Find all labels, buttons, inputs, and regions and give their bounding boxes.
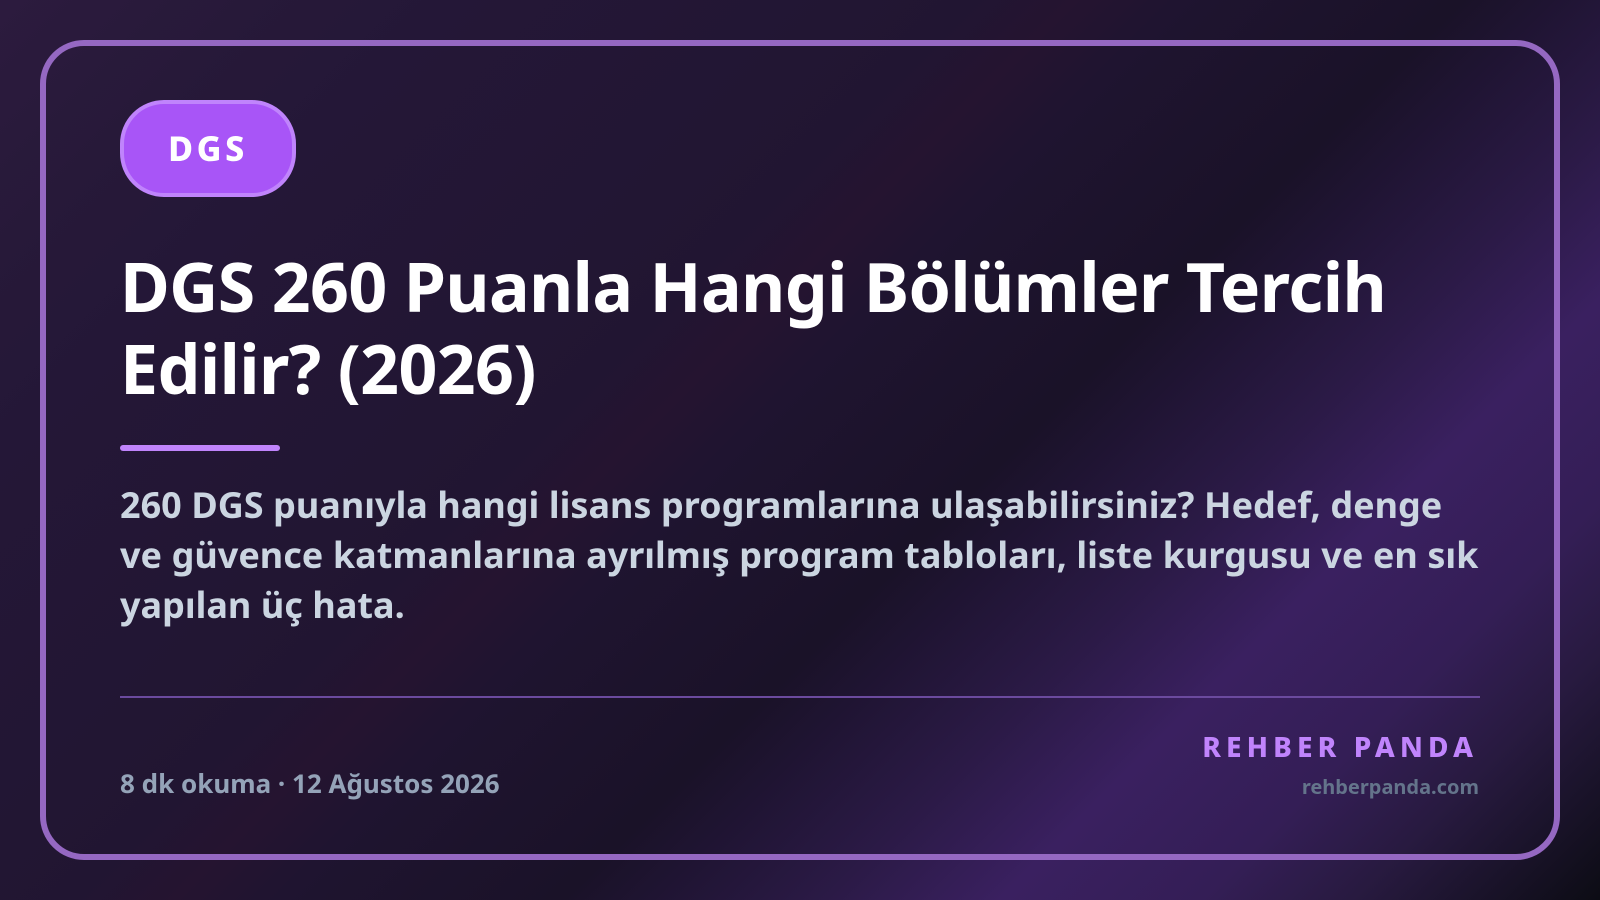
description: 260 DGS puanıyla hangi lisans programlarına ulaşabilirsiniz? Hedef, denge	[120, 480, 1442, 529]
website: rehberpanda.com	[1302, 773, 1479, 800]
footer divider	[120, 696, 1480, 698]
description: ve güvence katmanlarına ayrılmış program tabloları, liste kurgusu ve en sık	[120, 530, 1478, 579]
reading time and date: 8 dk okuma · 12 Ağustos 2026	[120, 765, 500, 801]
title	[120, 239, 1386, 414]
brand name: REHBER PANDA	[1202, 728, 1478, 766]
category badge: DGS: DGS	[168, 125, 248, 171]
accent rule	[120, 445, 280, 451]
description	[120, 480, 1478, 629]
title: DGS 260 Puanla Hangi Bölümler Tercih	[120, 239, 1386, 332]
category badge: DGS	[120, 100, 296, 197]
title: Edilir? (2026)	[120, 321, 536, 414]
description: yapılan üç hata.	[120, 580, 405, 629]
